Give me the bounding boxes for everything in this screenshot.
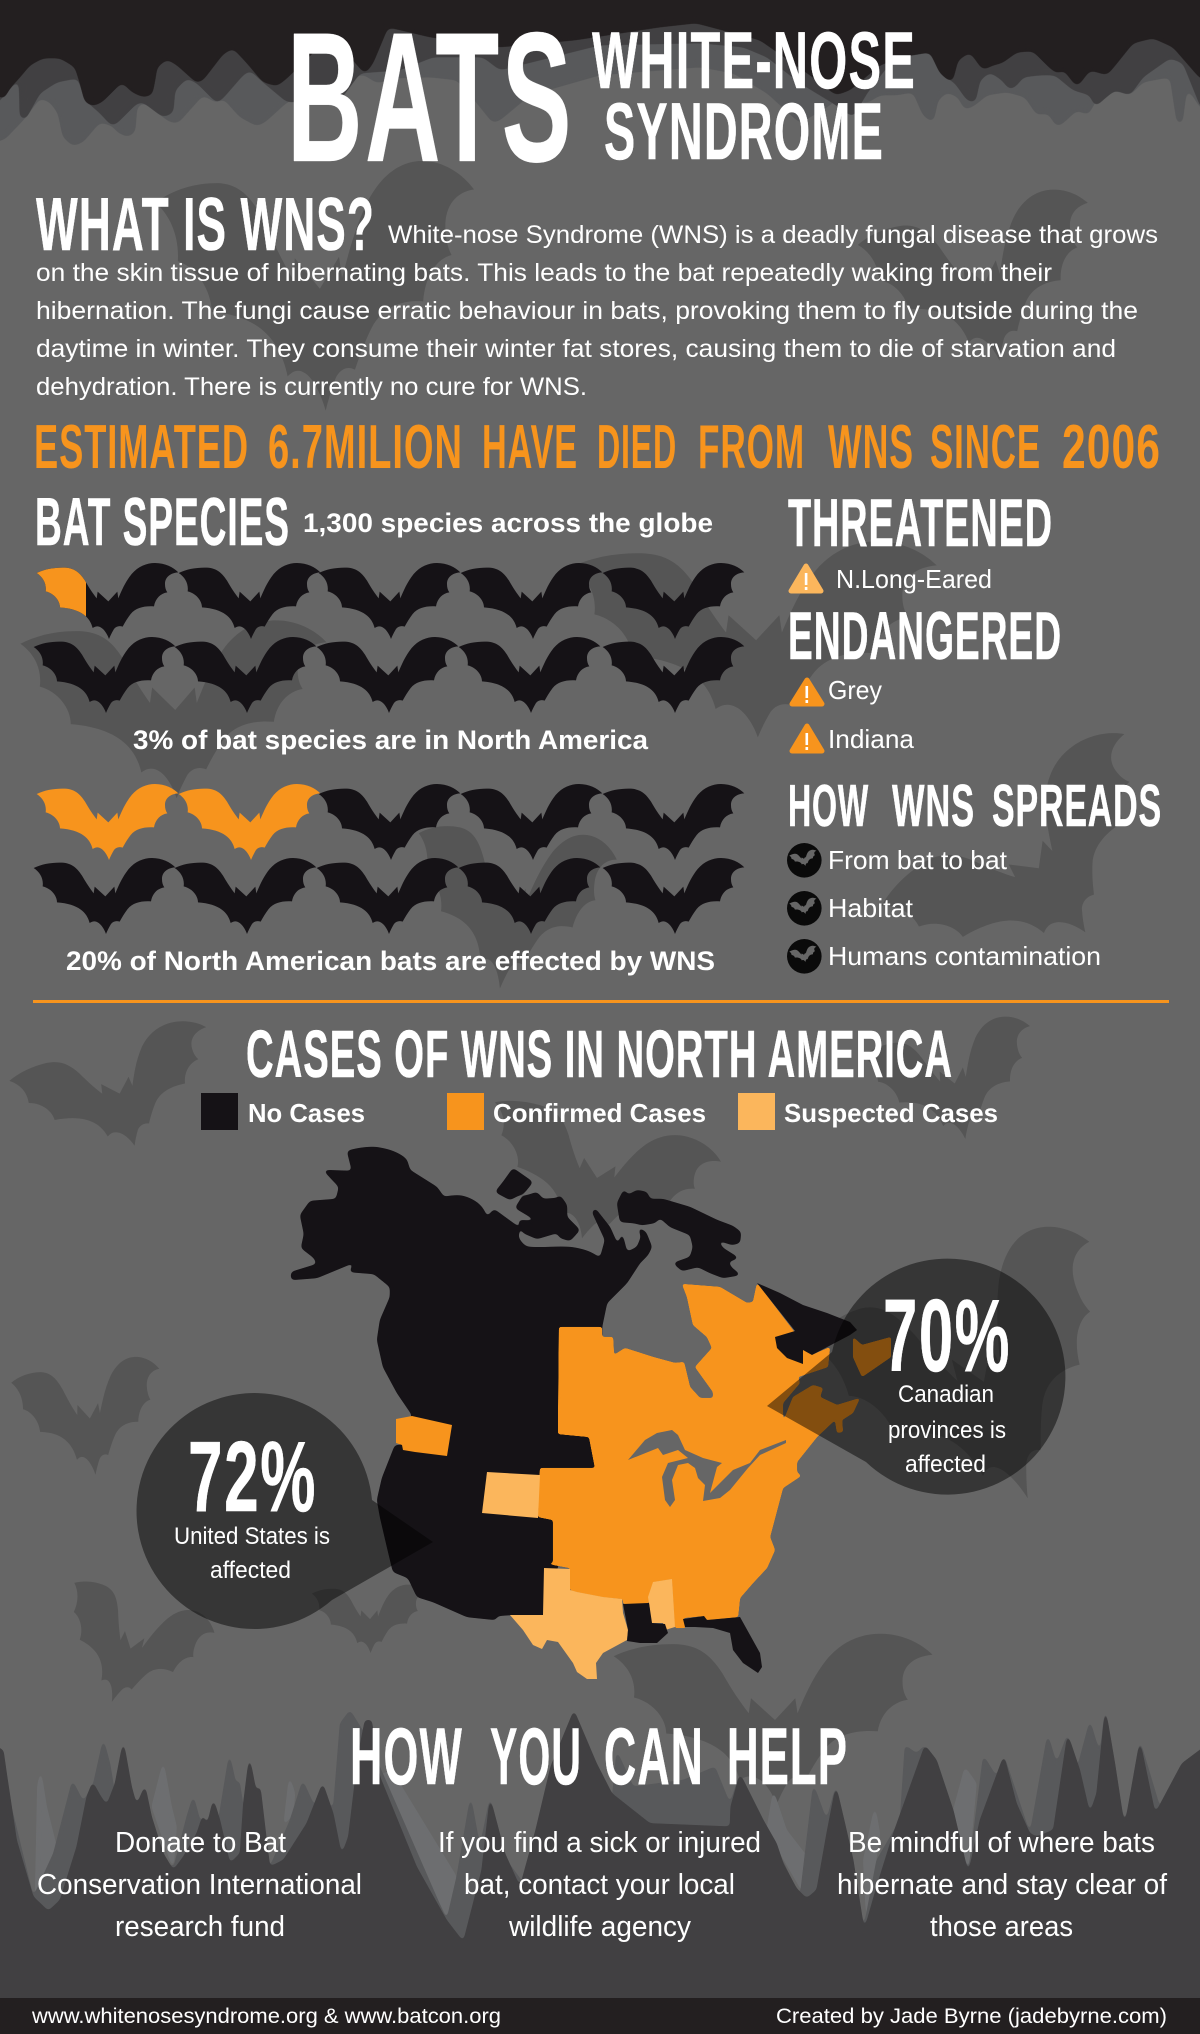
text: Grey: Grey [828, 675, 882, 705]
map: no cases regions [291, 1147, 741, 1620]
text: species count: 1,300 species across the globe [303, 508, 713, 538]
icon: warning orange [792, 726, 822, 751]
callout: 72 percent United States [137, 1393, 433, 1629]
panel: threatened and endangered species [788, 485, 1062, 754]
map: North America [291, 1147, 891, 1679]
footer: sources: www.whitenosesyndrome.org & www.batcon.org [31, 2005, 501, 2028]
headline stat: 6.7 million deaths: HAVE [482, 413, 578, 482]
text: contact agency: wildlife agency [508, 1911, 691, 1943]
text: humans contamination: Humans contamination [828, 941, 1101, 971]
callout: 70 percent Canada [767, 1259, 1065, 1495]
heading: how you can help: HOW [350, 1712, 463, 1802]
heading: what is WNS: WHAT IS WNS? [36, 182, 375, 266]
icon: bat in circle [787, 843, 822, 878]
text: contact agency [438, 1827, 761, 1943]
legend: No Cases [248, 1098, 365, 1128]
heading: how WNS spreads [788, 773, 1162, 839]
paragraph: description of WNS: dehydration. There is currently no cure for WNS. [36, 373, 587, 401]
text: donate [37, 1827, 362, 1943]
caption: United States: affected [210, 1557, 291, 1584]
headline stat: 6.7 million deaths: WNS [828, 413, 914, 482]
caption: Canadian provinces: Canadian [898, 1381, 994, 1408]
heading: how you can help: CAN [604, 1712, 704, 1802]
panel: bat species [34, 484, 744, 976]
panel: how WNS spreads [787, 773, 1162, 974]
caption: 20 percent: 20% of North American bats are effected by WNS [66, 946, 715, 976]
stat: 72 percent: 72% [188, 1421, 317, 1533]
headline stat: 6.7 million deaths: FROM [698, 413, 805, 482]
heading: how WNS spreads: HOW [788, 773, 869, 839]
legend: Confirmed Cases [493, 1098, 706, 1128]
pictogram: 3 percent of species [34, 563, 744, 713]
icon: warning light orange [791, 566, 821, 591]
headline stat: 6.7 million deaths [34, 413, 1161, 482]
text: contact agency: bat, contact your local [464, 1869, 735, 1901]
pictogram: 20 percent affected [34, 784, 744, 934]
caption: United States: United States is [174, 1523, 330, 1550]
section: what is WNS [36, 182, 1158, 401]
text: habitat: Habitat [828, 893, 914, 923]
map: suspected cases regions [482, 1472, 675, 1679]
text: be mindful: hibernate and stay clear of [837, 1869, 1168, 1901]
title: WHITE-NOSE [592, 16, 916, 106]
section: how you can help [37, 1712, 1168, 1943]
text: be mindful: Be mindful of where bats [848, 1827, 1155, 1859]
title: SYNDROME [604, 87, 884, 177]
heading: how you can help: YOU [490, 1712, 582, 1802]
text: contact agency: If you find a sick or injured [438, 1827, 761, 1859]
callout bubble shape [137, 1393, 433, 1629]
paragraph: description of WNS: daytime in winter. They consume their winter fat stores, causing them to die of starvation and [36, 335, 1116, 363]
heading: bat species: BAT SPECIES [35, 484, 290, 560]
text: N. Long-Eared: N.Long-Eared [836, 564, 992, 594]
stat: 70 percent: 70% [883, 1278, 1011, 1393]
icon: warning orange [792, 680, 822, 704]
headline stat: 6.7 million deaths: DIED [597, 413, 677, 482]
callout bubble shape [767, 1259, 1065, 1495]
legend: Suspected Cases [784, 1098, 998, 1128]
bottom cave stalagmites [0, 1707, 1200, 2034]
legend [201, 1093, 998, 1130]
top cave stalactites [0, 0, 1200, 150]
caption: Canadian provinces [888, 1381, 1006, 1478]
map: no cases south-east and Labrador [623, 1283, 857, 1673]
text: donate: Conservation International [37, 1869, 362, 1901]
map: great lakes [628, 1430, 786, 1507]
footer: credit: Created by Jade Byrne (jadebyrne.com) [776, 2005, 1167, 2028]
paragraph: description of WNS: on the skin tissue of hibernating bats. This leads to the bat repeatedly waking from their [36, 259, 1052, 287]
footer [0, 1998, 1200, 2034]
map: confirmed cases regions [396, 1283, 891, 1628]
icon: bat in circle [787, 939, 822, 974]
caption: Canadian provinces: provinces is [888, 1417, 1006, 1444]
headline stat: 6.7 million deaths: 6.7MILION [268, 413, 463, 482]
text: be mindful [837, 1827, 1168, 1943]
text: be mindful: those areas [930, 1911, 1073, 1943]
paragraph: description of WNS: White-nose Syndrome (WNS) is a deadly fungal disease that grows [388, 221, 1158, 249]
headline stat: 6.7 million deaths: SINCE [930, 413, 1041, 482]
caption: 3 percent: 3% of bat species are in North America [133, 725, 649, 755]
paragraph: description of WNS: hibernation. The fungi cause erratic behaviour in bats, provoking them to fly outside during the [36, 297, 1138, 325]
heading: how you can help: HELP [727, 1712, 848, 1802]
headline stat: 6.7 million deaths: ESTIMATED [34, 413, 249, 482]
icon: bat in circle [787, 891, 822, 926]
caption: Canadian provinces: affected [905, 1451, 986, 1478]
heading: how you can help [350, 1712, 848, 1802]
text: from bat to bat: From bat to bat [828, 845, 1008, 875]
paragraph: description of WNS [36, 221, 1158, 401]
text: donate: research fund [115, 1911, 285, 1943]
heading: how WNS spreads: WNS [892, 773, 975, 839]
title: BATS [287, 0, 574, 201]
text: donate: Donate to Bat [115, 1827, 286, 1859]
text: Indiana: Indiana [828, 724, 915, 754]
caption: United States [174, 1523, 330, 1584]
